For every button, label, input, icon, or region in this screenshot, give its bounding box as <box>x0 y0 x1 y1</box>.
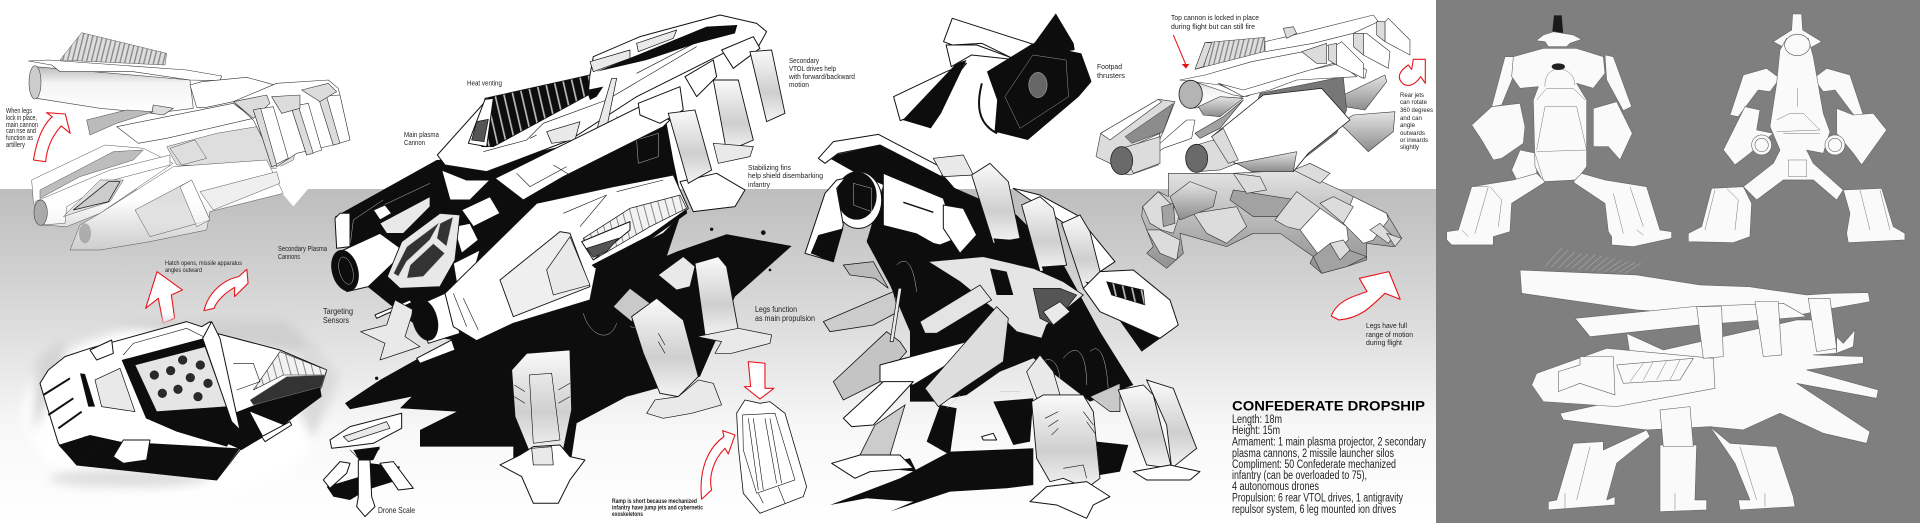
rear leg <box>658 257 772 353</box>
heat venting fins <box>468 75 590 147</box>
big white plate <box>1212 88 1350 172</box>
middle leg <box>613 288 722 418</box>
label: footpad thrusters <box>1097 62 1125 80</box>
label: artillery note <box>6 108 38 149</box>
arrow: ramp lowers <box>744 362 774 399</box>
label: heat venting: Heat venting <box>467 78 502 88</box>
second large view of dropship <box>805 134 1200 518</box>
label: rear jets note: angle <box>1400 122 1415 129</box>
label: secondary VTOL drives: motion <box>789 80 809 89</box>
rear black legs <box>893 398 1033 472</box>
label: secondary plasma cannons: Secondary Plasma <box>278 246 327 253</box>
cockpit sensor canopy <box>387 213 460 288</box>
left side plate <box>805 178 845 262</box>
label: secondary VTOL drives: with forward/backward <box>788 72 855 81</box>
label: artillery note: main cannon <box>6 122 38 129</box>
label: stabilizing fins: Stabilizing fins <box>748 163 791 172</box>
boarding ramp detail <box>737 400 807 513</box>
main dropship illustration <box>327 15 785 503</box>
left hull <box>1096 99 1175 175</box>
label: hatch opens: angles outward <box>165 267 202 274</box>
label: rear jets note: or inwards <box>1400 137 1429 144</box>
lower barrels <box>1122 137 1160 173</box>
second plate <box>117 103 253 143</box>
label: artillery note: When legs <box>6 108 32 115</box>
spec text block: Armament: 1 main plasma projector, 2 secondary <box>1232 436 1426 448</box>
arrow: missile apparatus angles outward <box>204 269 248 311</box>
under shadow <box>1237 77 1347 167</box>
label: hatch opens: Hatch opens, missile apparatus <box>165 260 243 267</box>
front leg <box>1032 395 1100 488</box>
vent fins <box>1545 248 1641 273</box>
label: targeting sensors: Sensors <box>323 315 349 325</box>
pods <box>1013 188 1115 272</box>
label: artillery note: lock in place, <box>6 115 37 122</box>
spec text block: 4 autonomous drones <box>1232 481 1319 493</box>
lower body base <box>1142 170 1402 273</box>
label: secondary VTOL drives <box>788 56 855 89</box>
spec text block <box>1232 414 1426 516</box>
label: ramp note <box>612 499 704 518</box>
label: drone scale: Drone Scale <box>378 505 415 515</box>
label: legs function: Legs function <box>755 305 797 314</box>
label: top cannon note: Top cannon is locked in place <box>1171 13 1259 22</box>
label: artillery note: artillery <box>6 142 25 149</box>
label: stabilizing fins: help shield disembarking <box>748 171 823 180</box>
label: secondary plasma cannons <box>278 246 327 261</box>
label: secondary plasma cannons: Cannons <box>278 254 300 261</box>
label: rear jets note: and can <box>1400 115 1422 122</box>
panel: orthographic views background <box>1436 0 1920 523</box>
pods <box>1302 43 1327 63</box>
black core <box>867 182 1133 402</box>
label: rear jets note: Rear jets <box>1400 92 1425 99</box>
rear pods <box>233 80 350 167</box>
label: rear jets note <box>1400 92 1434 151</box>
body and tail fins <box>1560 320 1878 443</box>
heat fins <box>60 33 167 65</box>
label: top cannon note: during flight but can still fire <box>1171 22 1255 31</box>
label: legs range of motion: Legs have full <box>1366 323 1407 330</box>
label: artillery note: can rise and <box>6 128 36 135</box>
main plasma cannon top hull <box>437 15 767 172</box>
label: targeting sensors: Targeting <box>323 306 353 316</box>
label: legs function <box>755 305 815 323</box>
label: main plasma cannon: Cannon <box>404 138 425 147</box>
top structure <box>1265 15 1378 52</box>
front armour <box>70 160 283 250</box>
label: legs range of motion: during flight <box>1366 340 1402 347</box>
front leg <box>500 350 585 503</box>
footpad thruster detail <box>894 13 1092 140</box>
cannon drum <box>835 172 977 257</box>
background: grey gradient floor <box>0 189 1436 523</box>
top barrel <box>1190 80 1243 108</box>
antenna <box>592 78 617 147</box>
hatch lid <box>203 322 240 430</box>
label: legs range of motion: range of motion <box>1366 332 1413 339</box>
left lower hull <box>32 145 173 227</box>
spec text block: Compliment: 50 Confederate mechanized <box>1232 459 1396 471</box>
label: legs function: as main propulsion <box>755 314 815 323</box>
orthographic side view <box>1520 248 1878 512</box>
background: white upper wall <box>0 0 1436 189</box>
main barrel <box>35 67 193 113</box>
top plate <box>28 60 222 81</box>
label: ramp note: Ramp is short because mechanized <box>612 499 697 505</box>
hull plates <box>1180 45 1367 97</box>
spec text block: Length: 18m <box>1232 414 1282 426</box>
flying configuration render <box>1096 15 1410 273</box>
label: footpad thrusters: thrusters <box>1097 71 1125 80</box>
label: main plasma cannon: Main plasma <box>404 130 440 139</box>
soft halo <box>23 327 323 500</box>
legs <box>860 405 905 458</box>
heat fins <box>1195 37 1265 69</box>
missile hatch render <box>23 320 340 500</box>
label: ramp note: infantry have jump jets and cybernetic <box>612 506 704 512</box>
thruster pods <box>638 37 785 212</box>
right block <box>1083 270 1178 352</box>
arrow: hatch opens upward <box>146 272 182 323</box>
centre plate <box>928 257 1083 338</box>
arrow: ramp swings <box>701 431 735 499</box>
label: main plasma cannon <box>404 130 440 147</box>
label: secondary VTOL drives: Secondary <box>789 56 819 65</box>
artillery mode render <box>28 33 350 250</box>
arrow: top cannon locked <box>1173 35 1189 69</box>
targeting sensor rod <box>375 300 412 318</box>
label: artillery note: function as <box>6 135 33 142</box>
title: CONFEDERATE DROPSHIP <box>1232 398 1425 414</box>
label: ramp note: exoskeletons <box>612 512 644 518</box>
arrow: leg range of motion <box>1331 272 1400 320</box>
open hatch frame <box>122 338 240 447</box>
side fins <box>1340 75 1387 110</box>
label: rear jets note: can rotate <box>1400 99 1427 106</box>
spec text block: infantry (can be overloaded to 75), <box>1232 470 1367 482</box>
label: legs range of motion <box>1366 323 1413 347</box>
hull <box>40 322 327 480</box>
label: targeting sensors <box>323 306 353 325</box>
label: footpad thrusters: Footpad <box>1097 62 1122 71</box>
mid plate under cannon <box>495 107 670 200</box>
label: hatch opens <box>165 260 243 274</box>
wing fins <box>843 262 888 288</box>
orthographic rear view <box>1688 14 1905 243</box>
spec text block: repulsor system, 6 leg mounted ion drives <box>1232 504 1396 516</box>
ram block <box>87 110 153 135</box>
drone scale figure <box>323 413 413 517</box>
right leg <box>1147 380 1197 468</box>
arrow: cannon rises <box>33 113 70 162</box>
canopy frame <box>63 180 123 217</box>
main barrel and cannon housing <box>327 170 500 294</box>
top block <box>818 134 943 177</box>
label: top cannon note <box>1171 13 1259 31</box>
ground shadow <box>830 442 1128 512</box>
label: rear jets note: 360 degrees <box>1400 107 1434 114</box>
spec text block: Propulsion: 6 rear VTOL drives, 1 antigravity <box>1232 492 1403 504</box>
side armor of secondary cannon <box>445 175 688 341</box>
spec text block: Height: 15m <box>1232 425 1280 437</box>
orthographic front view <box>1447 15 1672 247</box>
ground shadow of main dropship <box>345 228 792 460</box>
label: stabilizing fins <box>748 163 823 189</box>
label: stabilizing fins: infantry <box>748 180 770 189</box>
label: rear jets note: outwards <box>1400 130 1426 137</box>
missile silos <box>149 355 213 402</box>
rear interior <box>167 123 300 168</box>
label: secondary VTOL drives: VTOL drives help <box>789 64 836 73</box>
arrow: rear jets rotate <box>1399 59 1425 85</box>
black fuselage core <box>335 123 683 350</box>
spec text block: plasma cannons, 2 missile launcher silos <box>1232 448 1394 460</box>
central hull <box>1152 120 1195 157</box>
label: rear jets note: slightly <box>1400 144 1420 151</box>
front-left foot <box>361 300 420 360</box>
second barrel <box>408 293 460 343</box>
